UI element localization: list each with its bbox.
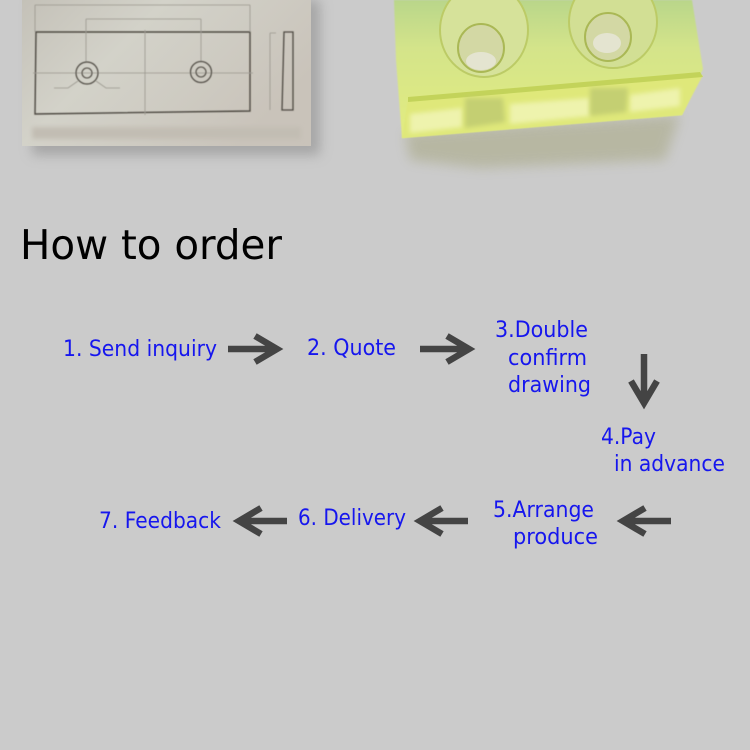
step 7: 7. Feedback: [99, 509, 221, 534]
arrow 2 to 3: [420, 336, 469, 362]
arrow 6 to 7: [239, 508, 287, 534]
arrow 1 to 2: [228, 336, 277, 362]
yellow block photo: [394, 0, 703, 168]
arrow 3 to 4: [631, 354, 657, 403]
step 4: [601, 425, 725, 477]
title: How to order: [20, 221, 282, 269]
step 3: [495, 318, 591, 398]
step 6: 6. Delivery: [298, 506, 406, 531]
step 1: 1. Send inquiry: [63, 337, 217, 362]
step 5: 5.Arrange: [493, 498, 594, 523]
step 2: 2. Quote: [307, 336, 396, 361]
drawing photo: [22, 0, 320, 155]
arrow 5 to 6: [420, 508, 468, 534]
step 5: produce: [513, 525, 598, 550]
step 4: in advance: [614, 452, 725, 477]
step 3: drawing: [508, 373, 591, 398]
step 3: 3.Double: [495, 318, 588, 343]
step 5: [493, 498, 598, 550]
arrow 4 to 5: [623, 508, 671, 534]
step 3: confirm: [508, 346, 587, 371]
step 4: 4.Pay: [601, 425, 656, 450]
